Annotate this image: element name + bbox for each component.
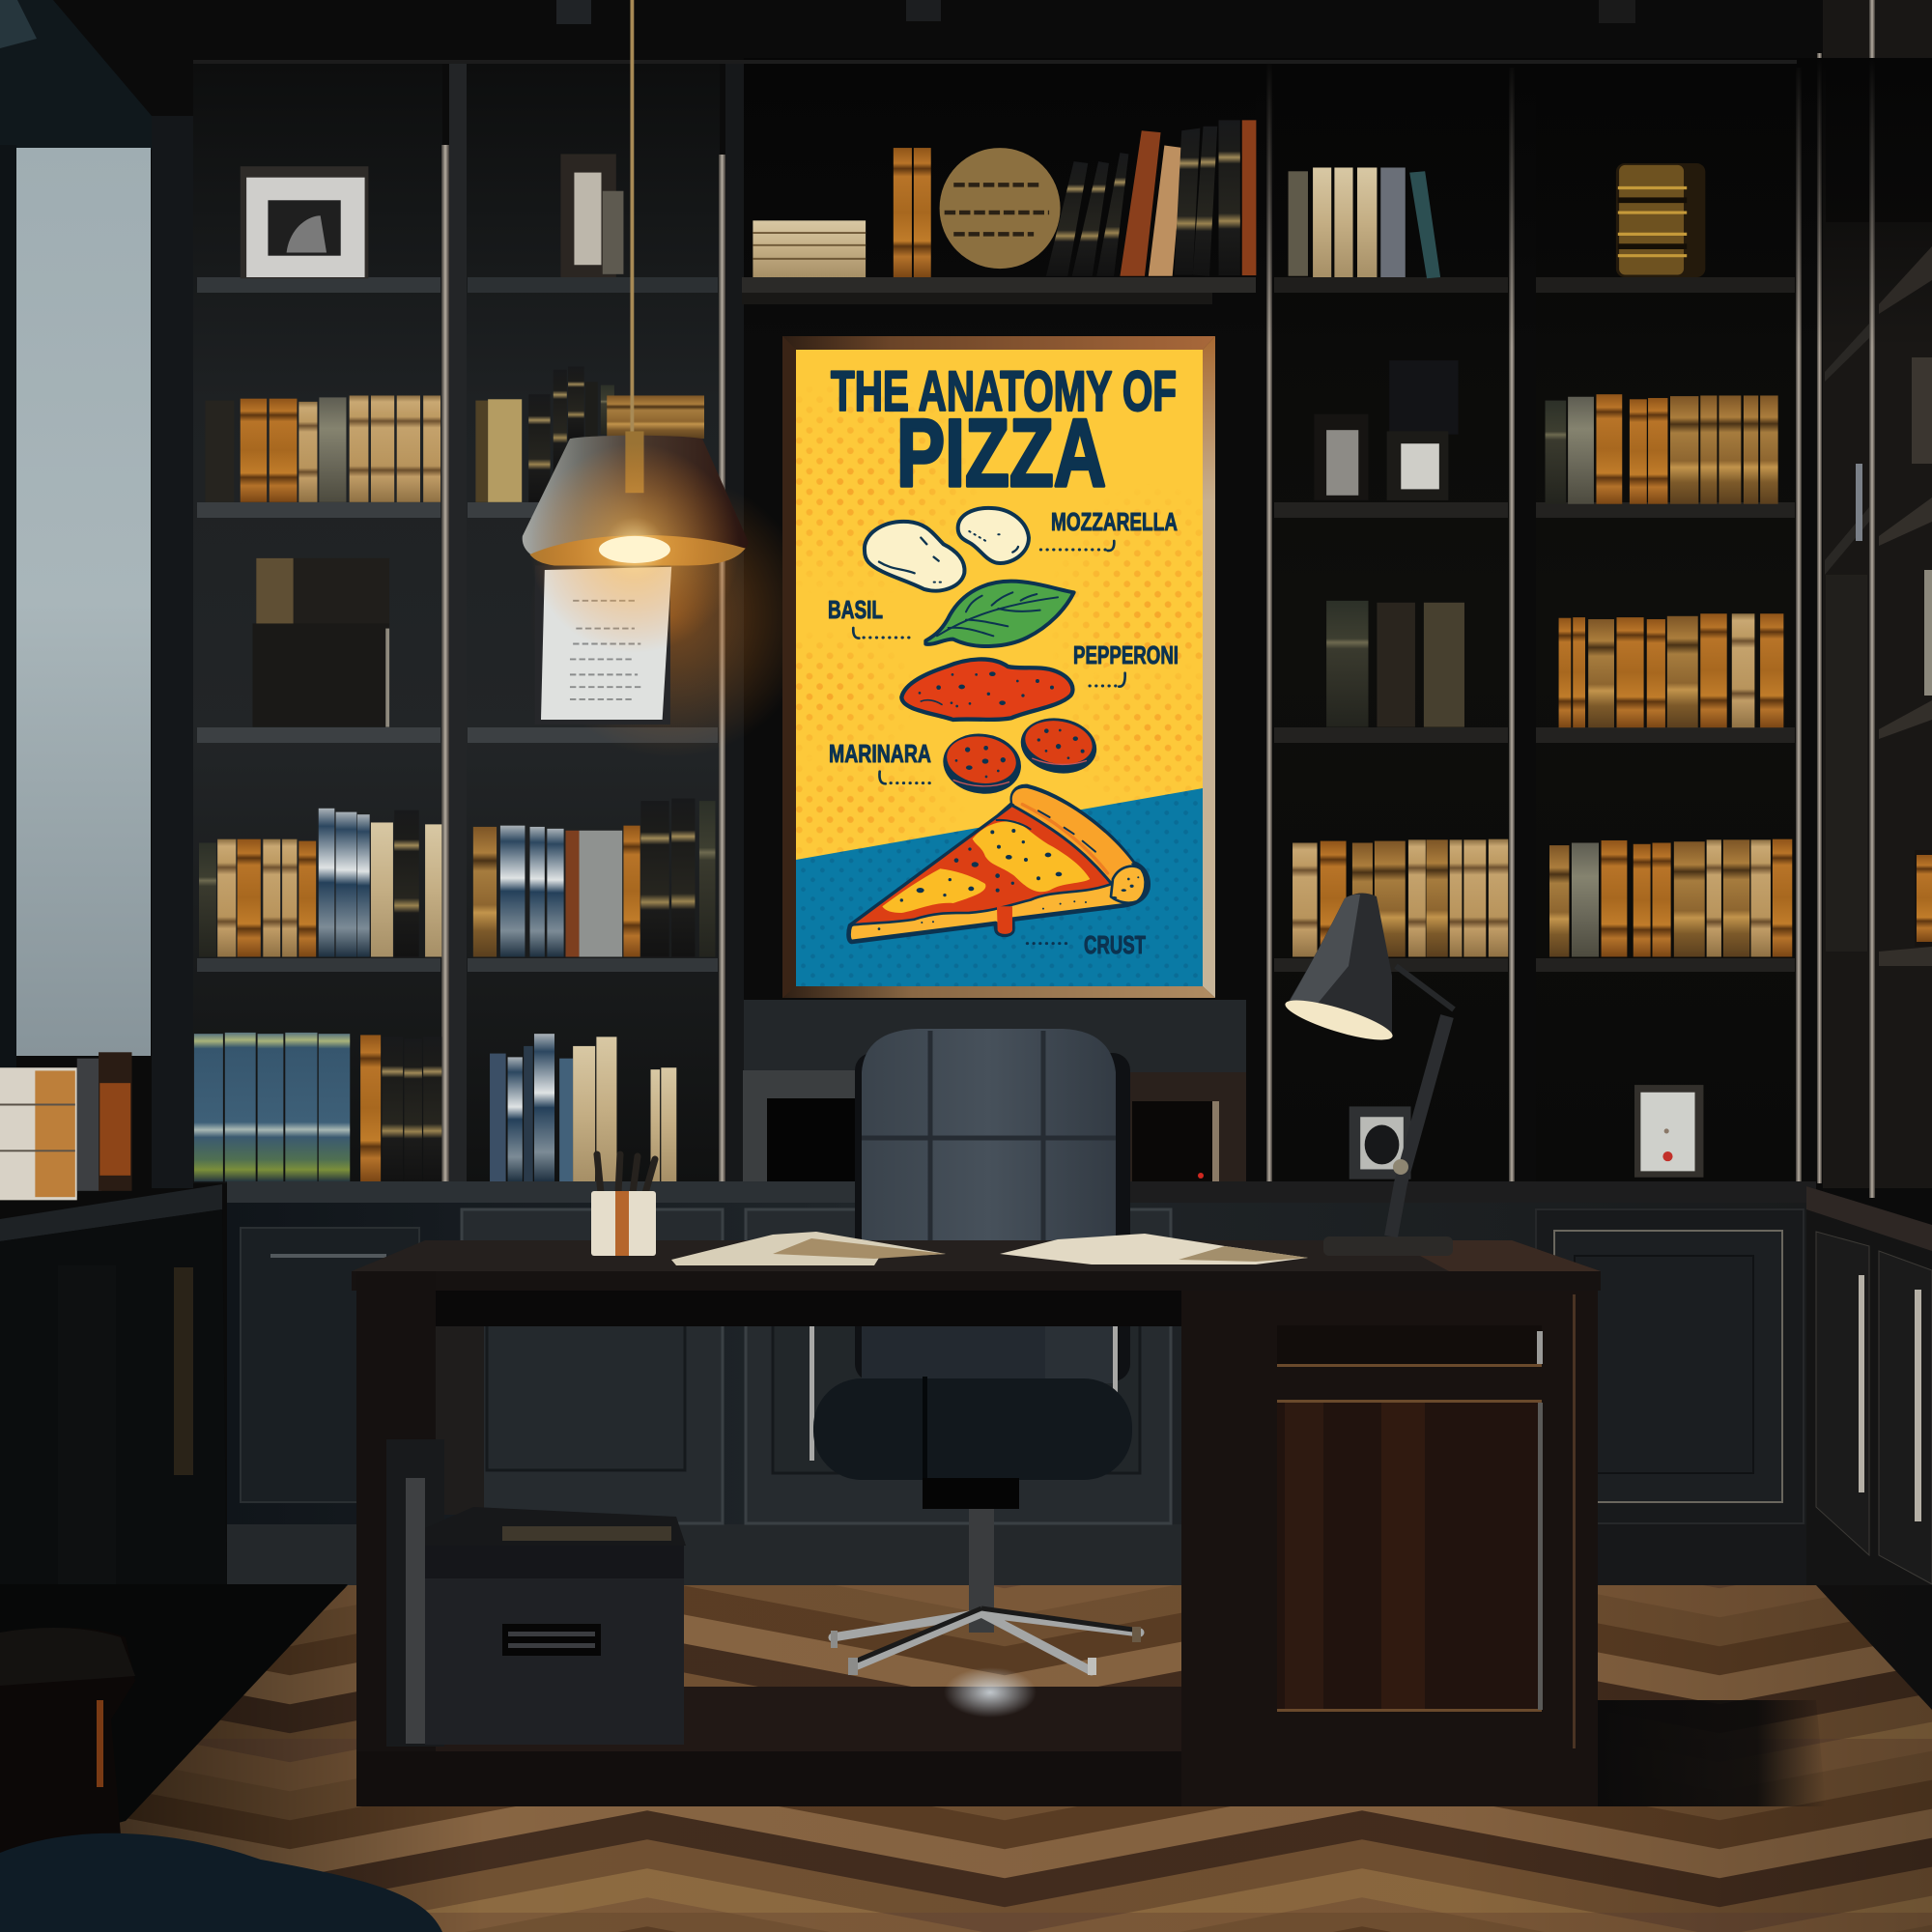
label: pepperoni: PEPPERONI [1073,640,1179,669]
objects and books, upper left [199,148,931,957]
label: basil: BASIL [828,595,883,624]
blue book row [194,1033,441,1181]
stool in foreground [0,1628,135,1864]
books row two, bay one [205,395,440,502]
poster [782,336,1215,998]
pizza slice illustration [849,786,1149,942]
title [831,360,1177,506]
label: crust [1027,930,1146,959]
window sill book stack [0,1052,131,1200]
books row two right [1546,394,1778,504]
leaning books [1046,120,1256,276]
chair base [831,1507,1141,1675]
books on lower left shelf [0,1033,676,1200]
label: basil [828,595,911,639]
title: THE ANATOMY OF [831,360,1177,423]
books top bay four [1289,167,1440,278]
desk [352,1240,1601,1806]
small frame [560,154,623,277]
file box [386,1439,686,1747]
black boxes [252,558,389,727]
small objects on lower right shelf [1350,1085,1703,1179]
title: PIZZA [896,399,1106,506]
label: marinara [829,739,931,783]
three tall dark books [1326,601,1464,727]
books row three, bay two [473,799,715,957]
label: pepperoni [1073,640,1179,687]
photo behind lamp [1350,1106,1410,1179]
label: crust: CRUST [1084,930,1146,959]
label: marinara: MARINARA [829,739,931,768]
pepperoni illustration [942,715,1098,796]
pendant lamp [523,0,749,653]
basil leaf illustration [925,582,1074,646]
desk apron [352,1271,1601,1326]
desk lamp [1282,893,1454,1256]
cushion in foreground [0,1833,442,1932]
left side cabinet [0,1184,227,1623]
books row four centre right [1293,839,1508,957]
books row three right [1559,613,1783,727]
pen cup [591,1154,656,1256]
chair seat [813,1377,1132,1509]
plaque [940,148,1061,269]
left wall and window light [0,0,193,1188]
photo frame [241,166,368,278]
right wall shelving [1825,246,1932,966]
books row three, bay one [199,809,441,957]
herringbone floor [0,1584,1932,1932]
chair back [810,1029,1130,1461]
framed paper [530,474,813,757]
objects and books, upper right [940,120,1792,957]
right pedestal [1181,1291,1598,1806]
top shelf stack and two books [753,148,931,277]
small frames [1314,360,1459,500]
gold canister [1616,163,1705,277]
open book on desk, right [1000,1234,1308,1264]
mozzarella illustration [865,508,1029,591]
books row four far right [1549,839,1792,957]
poster artwork [796,350,1203,986]
open book on desk, left [671,1232,946,1265]
white certificate frame [1634,1085,1703,1178]
office chair [810,1029,1141,1675]
bookcase frame [193,0,1932,1198]
shelves [197,277,1795,972]
marinara sauce illustration [901,659,1072,720]
poster frame [782,336,1215,998]
label: mozzarella: MOZZARELLA [1051,507,1178,536]
right side cabinet [1806,1186,1932,1932]
mixed book row [490,1034,676,1181]
low frames behind chair [743,1070,1246,1186]
books row two, bay two [475,366,704,502]
under-desk gloss floor [382,1667,1181,1752]
label: mozzarella [1040,507,1178,551]
lower cabinets [227,1181,1816,1587]
desk top [352,1240,1601,1271]
left leg and base [356,1271,1598,1806]
